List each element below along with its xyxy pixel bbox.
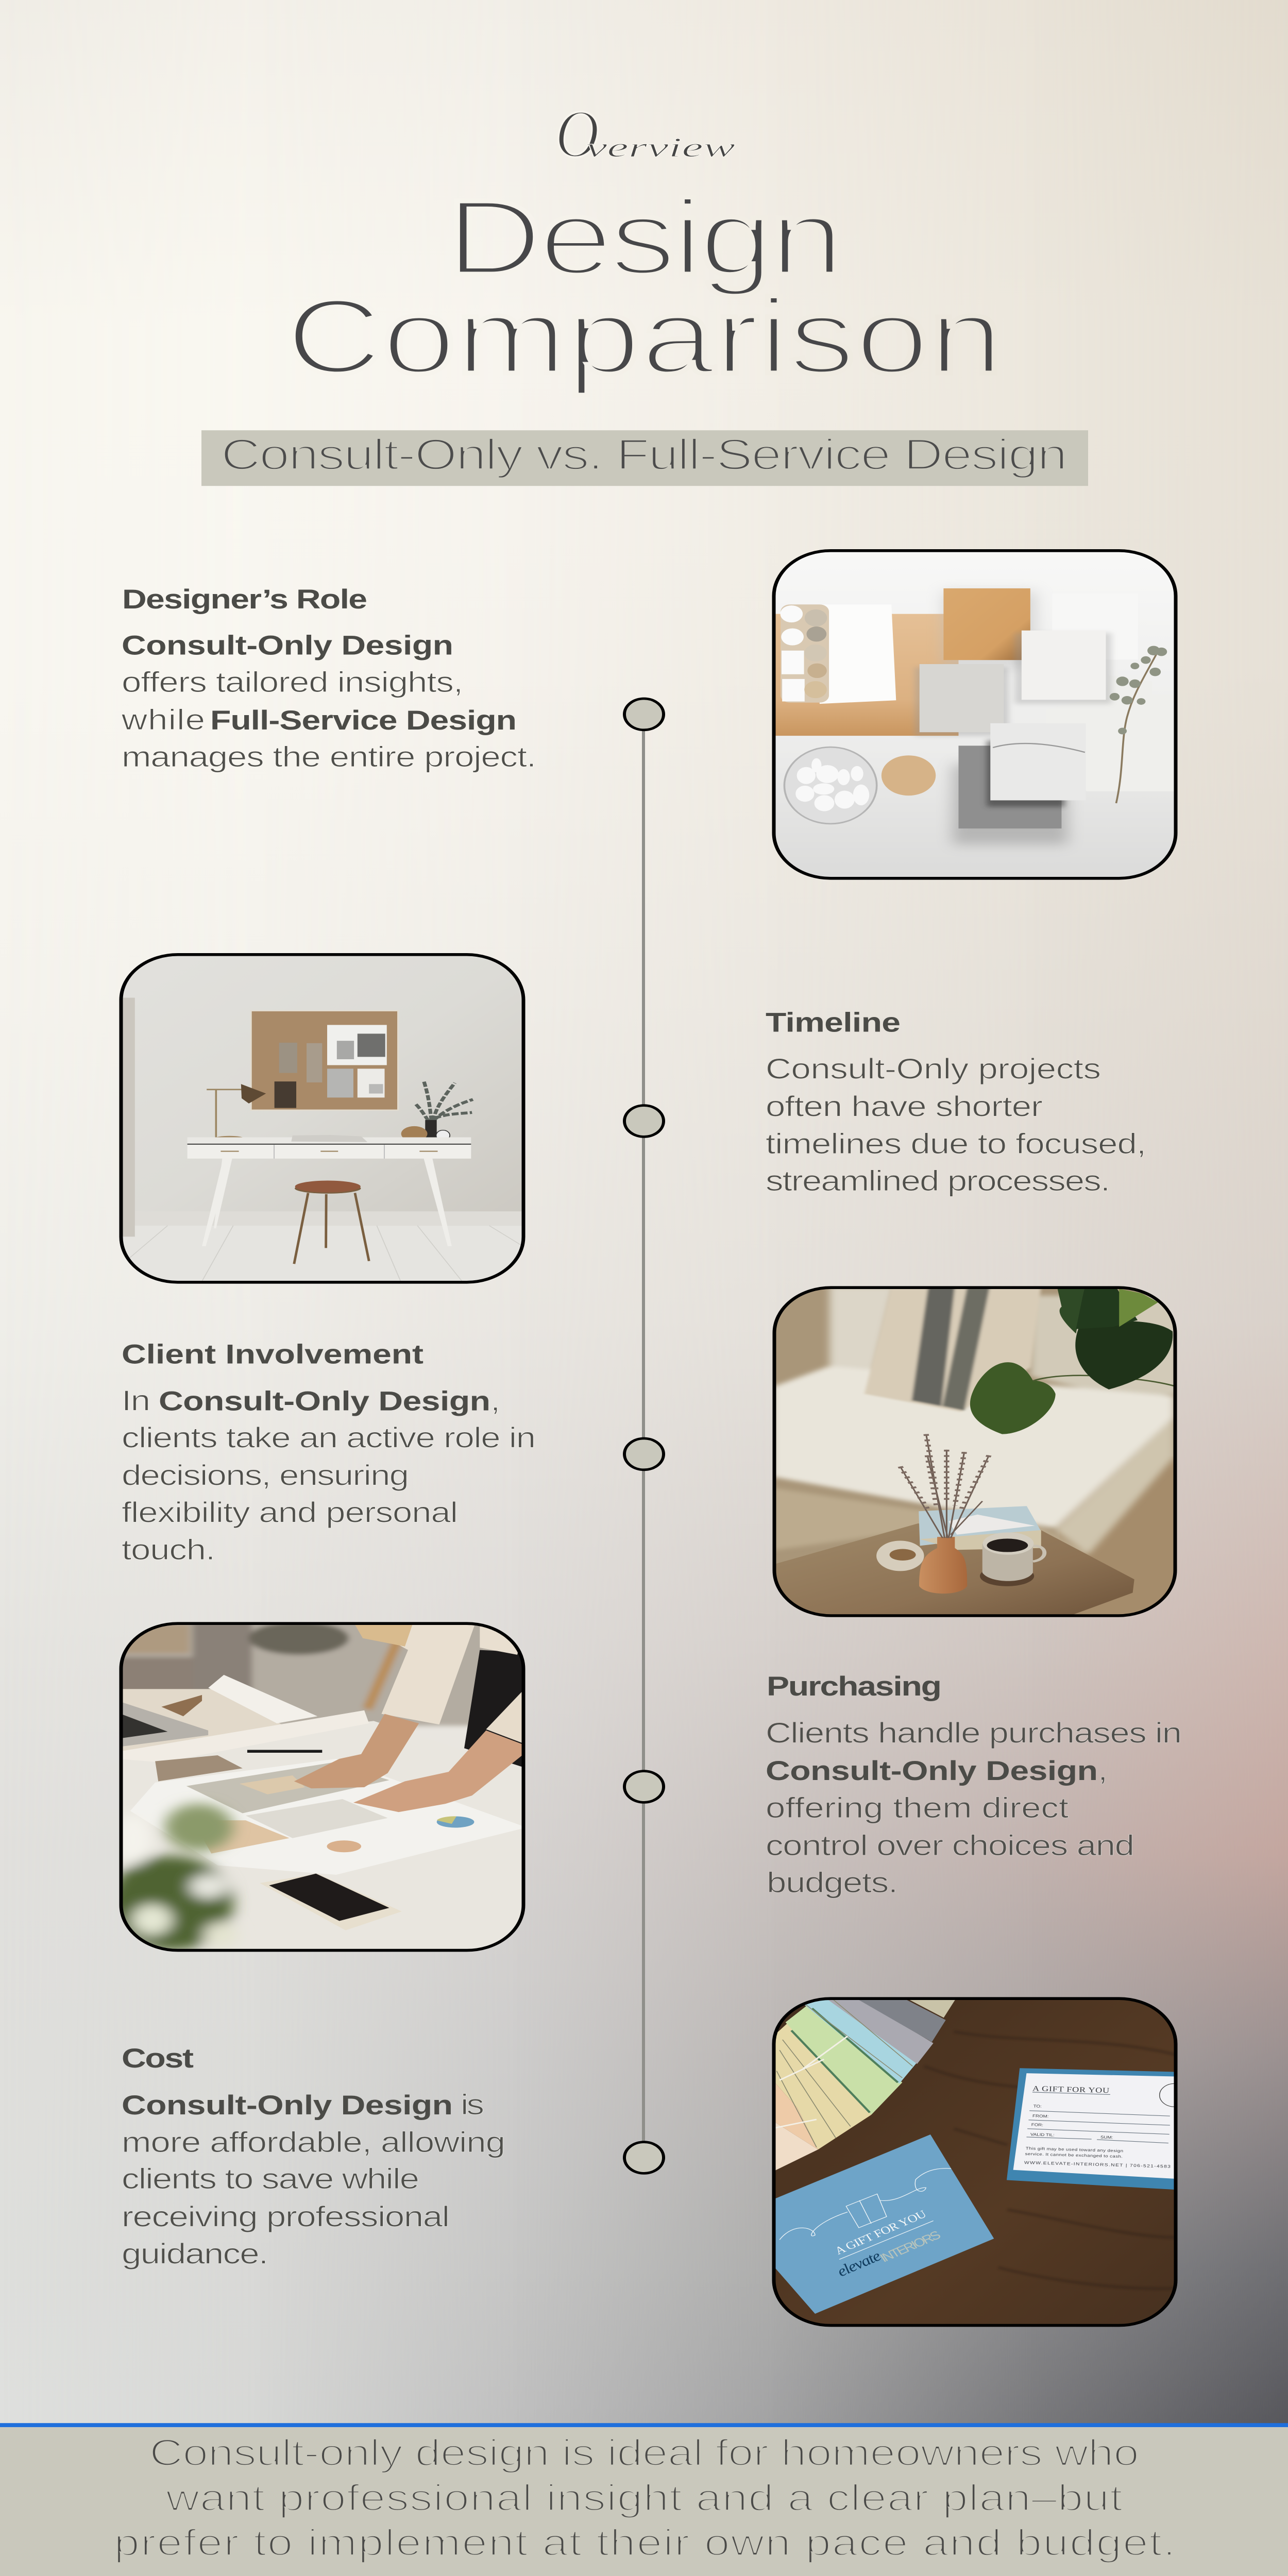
gift certificate: WWW.ELEVATE-INTERIORS.NET | 706-521-4583 <box>1024 2160 1171 2169</box>
wooden plank <box>774 614 958 736</box>
timeline node 5 <box>624 2142 664 2173</box>
text block: Designer's Role: Consult-Only Design <box>122 630 453 660</box>
fabric swatch <box>820 604 896 704</box>
floor <box>117 1226 527 1285</box>
dried sprig <box>1116 651 1158 803</box>
gift certificate <box>1007 2068 1189 2190</box>
text block: Timeline: Timeline <box>766 1007 901 1038</box>
text block: Designer's Role: Designer’s Role <box>122 584 367 614</box>
gift certificate: FOR: <box>1031 2122 1043 2127</box>
white tile top right <box>1052 594 1138 659</box>
subtitle band: Consult-Only vs. Full-Service Design <box>221 430 1067 479</box>
dried lavender <box>900 1434 989 1538</box>
gift certificate: A GIFT FOR YOU <box>1032 2084 1110 2095</box>
gift certificate: FROM: <box>1032 2113 1049 2119</box>
blue divider line <box>0 2423 1288 2427</box>
dark grey tile <box>958 745 1061 828</box>
oak block <box>943 588 1030 660</box>
text block: Purchasing <box>766 1671 1182 1899</box>
cloth and rolled plans <box>117 1689 293 1759</box>
book <box>919 1506 1041 1546</box>
photo: material samples flat lay <box>768 547 1180 883</box>
footer takeaway text <box>114 2432 1176 2564</box>
side table <box>772 1523 1134 1620</box>
curtain <box>123 998 135 1236</box>
text block: Client Involvement: Consult-Only Design <box>159 1386 490 1416</box>
timeline node 4 <box>624 1771 664 1802</box>
timeline spine <box>624 699 664 2173</box>
title: Comparison <box>286 277 1003 396</box>
text block: Client Involvement: Client Involvement <box>122 1339 423 1369</box>
text block: Designer's Role: manages the entire project. <box>122 741 536 773</box>
eyebrow: Overview: O <box>555 96 599 172</box>
arms and hands <box>294 1714 419 1788</box>
text block: Timeline: Consult-Only projects <box>766 1053 1101 1085</box>
text block: Purchasing: control over choices and <box>766 1829 1134 1861</box>
white tile centre <box>1022 631 1106 700</box>
gift card front <box>771 2134 994 2314</box>
pie charts <box>437 1816 474 1828</box>
gift certificate: This gift may be used toward any design <box>1026 2146 1123 2153</box>
marble tile <box>990 723 1086 800</box>
photo: white desk with cork board <box>117 953 527 1285</box>
sofa seat front <box>772 1488 1088 1555</box>
text block: Timeline <box>766 1007 1146 1197</box>
blurred room <box>117 1619 527 1726</box>
text block: Client Involvement: clients take an active role in <box>122 1422 536 1454</box>
text block: Cost: guidance. <box>122 2238 268 2270</box>
desk lamp <box>207 1089 242 1138</box>
timeline node 1 <box>624 699 664 730</box>
plant leaves <box>970 1362 1056 1434</box>
gift card front: INTERIORS <box>877 2229 943 2265</box>
gift certificate: service. It cannot be exchanged to cash. <box>1025 2151 1123 2159</box>
paint fan deck <box>771 1997 957 2173</box>
footer takeaway text: want professional insight and a clear plan–but <box>165 2477 1123 2519</box>
footer takeaway text: Consult-only design is ideal for homeowners who <box>149 2432 1139 2474</box>
plant and vase <box>416 1080 473 1121</box>
striped pillow <box>865 1286 1041 1412</box>
wood grain <box>924 2031 1176 2289</box>
text block: Cost <box>122 2043 505 2270</box>
footer takeaway text: prefer to implement at their own pace and budget. <box>114 2522 1176 2564</box>
text block: Client Involvement <box>122 1339 536 1566</box>
text block: Cost: is <box>461 2089 484 2121</box>
text block: Designer's Role: offers tailored insights, <box>122 667 463 699</box>
sample palette <box>781 604 829 703</box>
text block: Timeline: timelines due to focused, <box>766 1128 1146 1160</box>
text block: Designer's Role <box>121 584 536 773</box>
text block: Purchasing: Clients handle purchases in <box>766 1717 1182 1749</box>
text block: Purchasing: budgets. <box>767 1867 898 1899</box>
glass bowl with pebbles <box>784 747 877 824</box>
title: Design <box>446 178 844 297</box>
coaster and mug <box>980 1566 1034 1586</box>
photo: gift cards and paint fan <box>771 1994 1189 2330</box>
timeline node 2 <box>624 1106 664 1137</box>
design boards <box>130 1759 527 1875</box>
desk <box>202 1158 232 1246</box>
terracotta vase <box>919 1537 967 1594</box>
blurred foreground flowers <box>108 1804 238 1951</box>
phone <box>260 1874 402 1930</box>
gift card front: elevate <box>833 2248 885 2279</box>
photo: hands on design boards <box>108 1619 527 1958</box>
title <box>286 178 1003 396</box>
gift certificate: SUM: <box>1100 2135 1113 2140</box>
text block: Purchasing: Consult-Only Design <box>766 1755 1098 1786</box>
wooden ball <box>882 755 936 795</box>
text block: Purchasing: , <box>1098 1755 1108 1787</box>
baseboard <box>133 1211 527 1226</box>
text block: Designer's Role: Full-Service Design <box>210 705 517 735</box>
text block: Cost: Consult-Only Design <box>122 2090 453 2120</box>
text block: Purchasing: Purchasing <box>767 1671 942 1702</box>
text block: Client Involvement: In <box>122 1385 150 1417</box>
stool <box>294 1193 369 1264</box>
footer band <box>0 2427 1288 2576</box>
textured white panel <box>1046 675 1174 791</box>
sofa back <box>772 1286 1179 1555</box>
cork board <box>251 1011 398 1110</box>
text block: Timeline: often have shorter <box>766 1091 1043 1123</box>
text block: Cost: Cost <box>122 2043 194 2073</box>
text block: Client Involvement: touch. <box>122 1534 215 1566</box>
eyebrow: Overview: verview <box>586 132 735 162</box>
text block: Cost: receiving professional <box>122 2201 450 2233</box>
sweater sleeves and dark top <box>464 1650 527 1768</box>
sofa seat <box>772 1366 1175 1528</box>
timeline node 3 <box>624 1438 664 1470</box>
text block: Purchasing: offering them direct <box>766 1792 1069 1824</box>
laptop <box>117 1701 208 1747</box>
gift certificate: VALID TIL: <box>1030 2132 1055 2137</box>
bowl <box>876 1540 924 1571</box>
gift certificate: TO: <box>1033 2104 1042 2109</box>
floor right <box>1060 1456 1183 1620</box>
grey tile <box>920 664 1004 732</box>
text block: Client Involvement: , <box>490 1385 500 1417</box>
table surface <box>117 1721 527 1958</box>
gift card front: A GIFT FOR YOU <box>833 2208 929 2257</box>
text block: Cost: clients to save while <box>122 2163 419 2195</box>
photo: sofa corner with side table <box>768 1284 1183 1620</box>
text block: Designer's Role: while <box>121 704 205 736</box>
text block: Client Involvement: flexibility and personal <box>122 1497 458 1529</box>
text block: Timeline: streamlined processes. <box>766 1165 1110 1197</box>
text block: Cost: more affordable, allowing <box>122 2126 505 2158</box>
text block: Client Involvement: decisions, ensuring <box>122 1460 409 1492</box>
pen <box>247 1748 322 1754</box>
